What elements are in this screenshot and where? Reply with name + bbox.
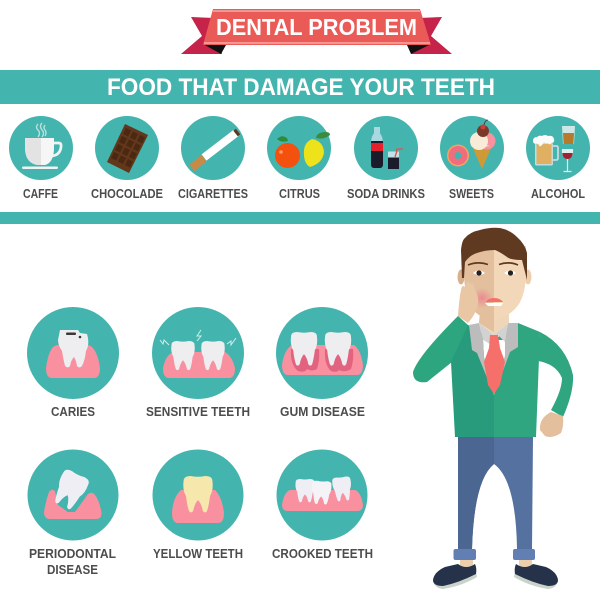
food item: citrus bbox=[267, 116, 331, 201]
character legs bbox=[433, 437, 558, 589]
food item: chocolate: CHOCOLADE bbox=[91, 187, 163, 201]
food item: cigarettes: CIGARETTES bbox=[178, 187, 248, 201]
character right arm and fist bbox=[538, 332, 573, 437]
problem: periodontal disease bbox=[28, 450, 118, 577]
problem: crooked teeth bbox=[272, 450, 373, 561]
food item: soda drinks bbox=[347, 116, 425, 201]
problem: periodontal disease: PERIODONTAL bbox=[29, 547, 116, 561]
food item: soda drinks: SODA DRINKS bbox=[347, 187, 425, 201]
problem: yellow teeth: YELLOW TEETH bbox=[153, 547, 243, 561]
food item: sweets bbox=[440, 116, 504, 201]
problem: caries: CARIES bbox=[51, 405, 95, 419]
food item: citrus: CITRUS bbox=[279, 187, 320, 201]
heading band bbox=[0, 70, 600, 104]
title text: DENTAL PROBLEM bbox=[216, 14, 417, 40]
heading text: FOOD THAT DAMAGE YOUR TEETH bbox=[107, 74, 495, 101]
character head bbox=[458, 228, 532, 335]
food item: cigarettes bbox=[178, 116, 248, 201]
title ribbon bbox=[181, 9, 452, 54]
food item: sweets: SWEETS bbox=[449, 187, 494, 201]
food item: alcohol: ALCOHOL bbox=[531, 187, 585, 201]
problem: crooked teeth: CROOKED TEETH bbox=[272, 547, 373, 561]
food item: caffe: CAFFE bbox=[23, 187, 58, 201]
problem: sensitive teeth: SENSITIVE TEETH bbox=[146, 405, 250, 419]
problem: periodontal disease: DISEASE bbox=[47, 563, 98, 577]
problem: sensitive teeth bbox=[146, 307, 250, 419]
problem: gum disease bbox=[276, 307, 368, 419]
problem: gum disease: GUM DISEASE bbox=[280, 405, 365, 419]
problem: caries bbox=[27, 307, 119, 419]
lower divider band bbox=[0, 212, 600, 224]
character: man with toothache bbox=[413, 228, 573, 589]
problem: yellow teeth bbox=[152, 450, 244, 561]
food item: chocolate bbox=[91, 116, 163, 201]
character hand on cheek bbox=[458, 281, 478, 323]
character jacket bbox=[413, 316, 540, 437]
food item: caffe bbox=[9, 116, 73, 201]
food item: alcohol bbox=[526, 116, 590, 201]
